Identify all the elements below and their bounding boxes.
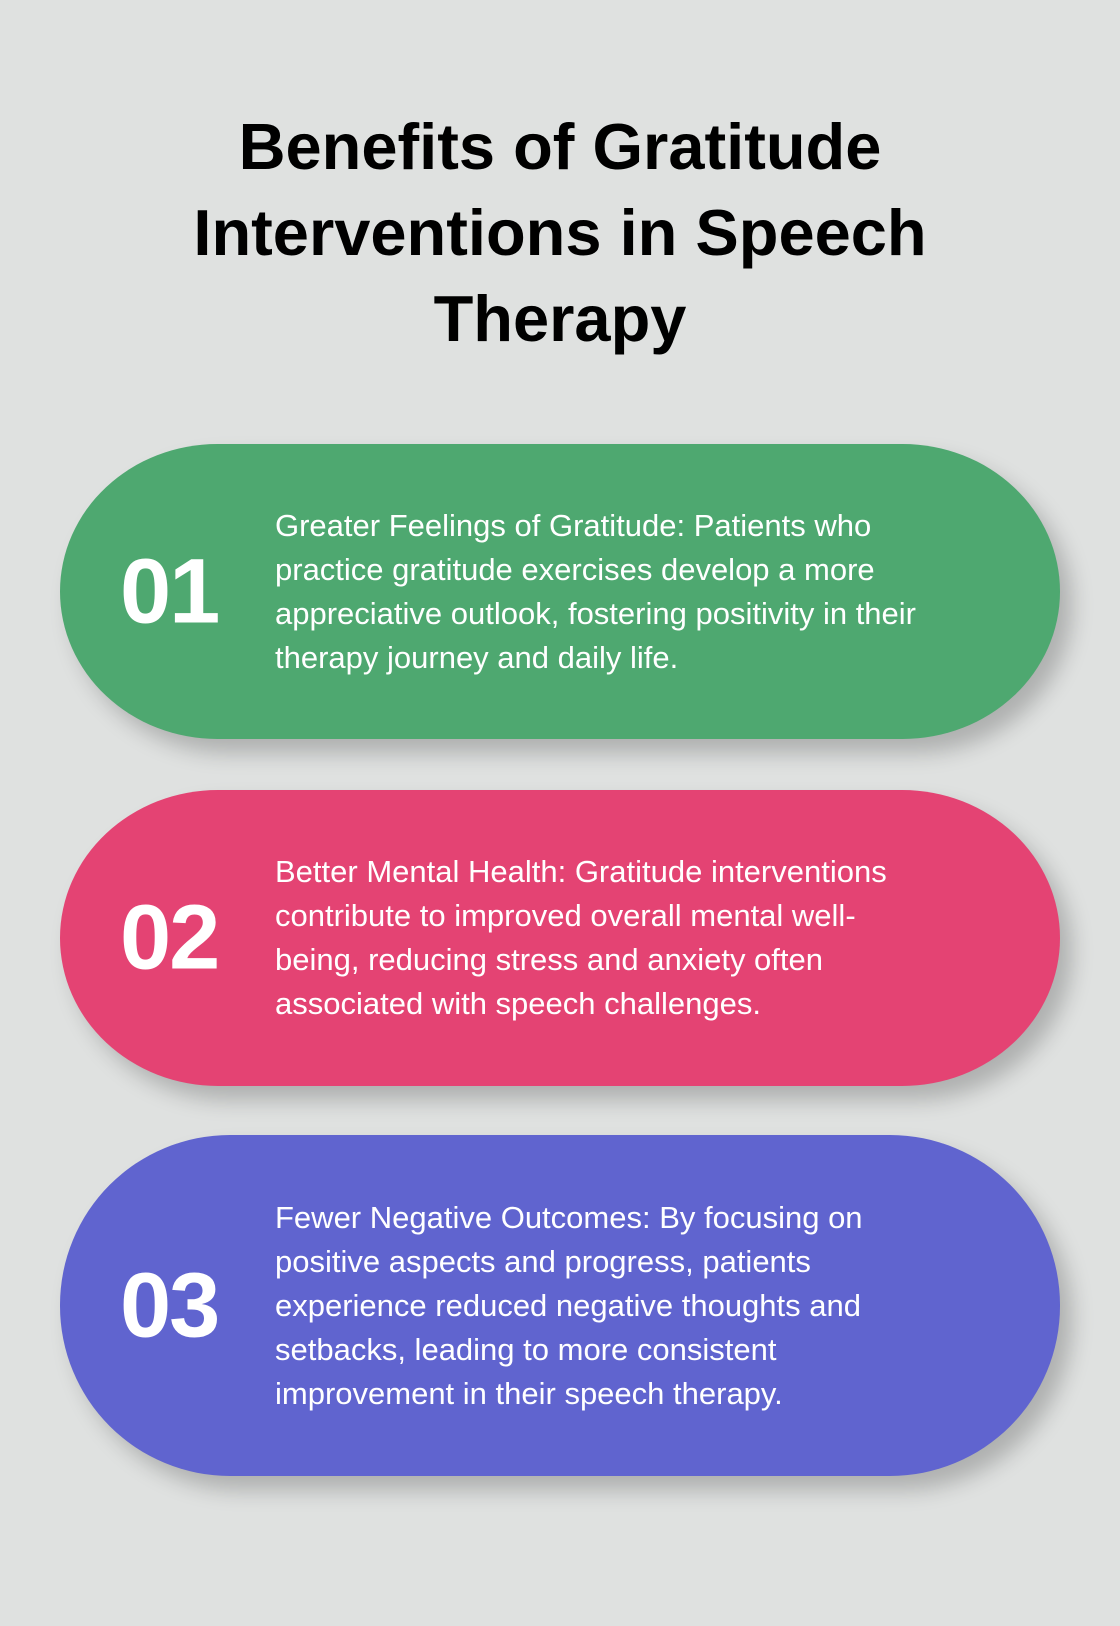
text 03: Fewer Negative Outcomes: By focusing on bbox=[275, 1200, 863, 1234]
panel: 01 gratitude bbox=[60, 444, 1060, 739]
panel: 02 mental health bbox=[60, 790, 1060, 1086]
number 03: 03 bbox=[120, 1254, 218, 1356]
text 01: therapy journey and daily life. bbox=[275, 640, 678, 674]
title bbox=[193, 110, 927, 355]
text 03: setbacks, leading to more consistent bbox=[275, 1332, 776, 1366]
text 03 bbox=[275, 1200, 863, 1410]
title: Benefits of Gratitude bbox=[239, 110, 881, 183]
text 02: Better Mental Health: Gratitude interventions bbox=[275, 854, 887, 889]
text 01: Greater Feelings of Gratitude: Patients who bbox=[275, 508, 871, 542]
panel: 03 negative outcomes bbox=[60, 1135, 1060, 1476]
number 02: 02 bbox=[120, 886, 218, 988]
text 03: positive aspects and progress, patients bbox=[275, 1244, 811, 1278]
text 02 bbox=[275, 854, 887, 1021]
text 02: being, reducing stress and anxiety often bbox=[275, 942, 823, 977]
text 01 bbox=[275, 508, 916, 674]
text 01: practice gratitude exercises develop a more bbox=[275, 552, 875, 586]
text 02: associated with speech challenges. bbox=[275, 986, 761, 1021]
text 03: experience reduced negative thoughts and bbox=[275, 1288, 861, 1322]
text 03: improvement in their speech therapy. bbox=[275, 1376, 783, 1410]
number 01: 01 bbox=[120, 540, 218, 642]
title: Interventions in Speech bbox=[193, 196, 927, 269]
title: Therapy bbox=[434, 282, 686, 355]
text 01: appreciative outlook, fostering positivity in their bbox=[275, 596, 916, 630]
text 02: contribute to improved overall mental well- bbox=[275, 898, 856, 933]
